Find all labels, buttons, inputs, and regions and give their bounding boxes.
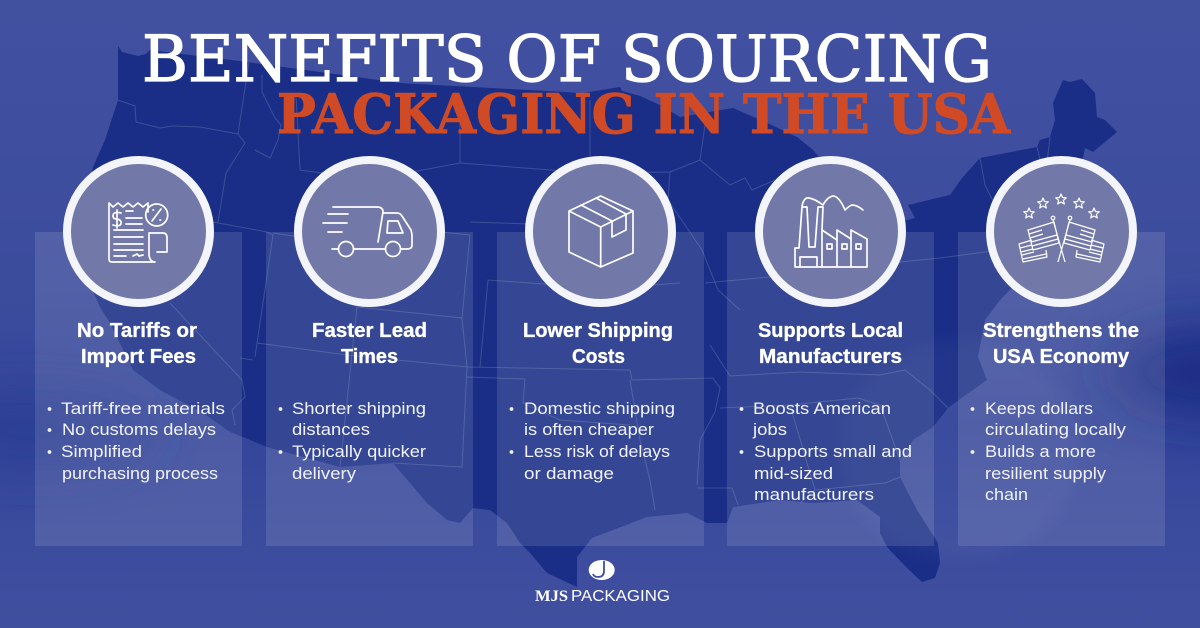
- bullet list: Shorter shipping: [292, 399, 426, 418]
- logo: MJS Packaging: MJS: [535, 588, 568, 605]
- heading: [77, 320, 197, 368]
- bullet list: resilient supply: [985, 464, 1107, 483]
- heading: Strengthens the: [983, 320, 1139, 342]
- icon: cardboard box: [529, 160, 672, 303]
- heading: Lower Shipping: [523, 320, 673, 342]
- title: [142, 23, 1011, 146]
- bullet list: mid-sized: [754, 464, 833, 483]
- bullet list: Tariff-free materials: [61, 399, 225, 418]
- heading: Import Fees: [81, 346, 196, 368]
- bullet list: [48, 399, 225, 483]
- bullet list: No customs delays: [62, 420, 216, 439]
- bullet list: manufacturers: [754, 485, 874, 504]
- panel: Faster Lead Times: [266, 160, 473, 546]
- bullet list: Less risk of delays: [524, 442, 670, 461]
- bullet list: circulating locally: [985, 420, 1127, 439]
- heading: [523, 320, 673, 368]
- bullet list: distances: [292, 420, 370, 439]
- bullet list: [510, 399, 675, 483]
- bullet list: purchasing process: [62, 464, 218, 483]
- map of the USA: [75, 46, 1117, 587]
- bullet list: Typically quicker: [292, 442, 426, 461]
- bullet list: Boosts American: [753, 399, 891, 418]
- heading: [758, 320, 903, 368]
- heading: No Tariffs or: [77, 320, 197, 342]
- bullet list: jobs: [752, 420, 787, 439]
- bullet list: or damage: [524, 464, 614, 483]
- heading: USA Economy: [993, 346, 1130, 368]
- title: PACKAGING IN THE USA: [277, 82, 1011, 146]
- icon: delivery truck: [298, 160, 441, 303]
- bullet list: Supports small and: [754, 442, 912, 461]
- bullet list: [740, 399, 912, 504]
- logo: MJS Packaging: PACKAGING: [571, 588, 670, 605]
- panel: Supports Local Manufacturers: [727, 160, 934, 546]
- panel: No Tariffs or Import Fees: [35, 160, 242, 546]
- bullet list: Keeps dollars: [985, 399, 1093, 418]
- heading: Manufacturers: [759, 346, 902, 368]
- panel: Lower Shipping Costs: [497, 160, 704, 546]
- bullet list: [971, 399, 1127, 504]
- heading: Supports Local: [758, 320, 903, 342]
- panel: Strengthens the USA Economy: [958, 160, 1165, 546]
- heading: [312, 320, 427, 368]
- icon: factory: [759, 160, 902, 303]
- icon: receipt with percent: [67, 160, 210, 303]
- heading: Times: [341, 346, 398, 368]
- logo: MJS Packaging: [535, 560, 670, 605]
- bullet list: delivery: [292, 464, 357, 483]
- bullet list: Domestic shipping: [524, 399, 675, 418]
- icon: crossed flags and stars: [990, 160, 1133, 303]
- bullet list: chain: [985, 485, 1028, 504]
- bullet list: Simplified: [61, 442, 142, 461]
- heading: Costs: [572, 346, 625, 368]
- bullet list: Builds a more: [985, 442, 1096, 461]
- bullet list: is often cheaper: [524, 420, 654, 439]
- title: BENEFITS OF SOURCING: [142, 23, 992, 97]
- bullet list: [279, 399, 426, 483]
- heading: [983, 320, 1139, 368]
- heading: Faster Lead: [312, 320, 427, 342]
